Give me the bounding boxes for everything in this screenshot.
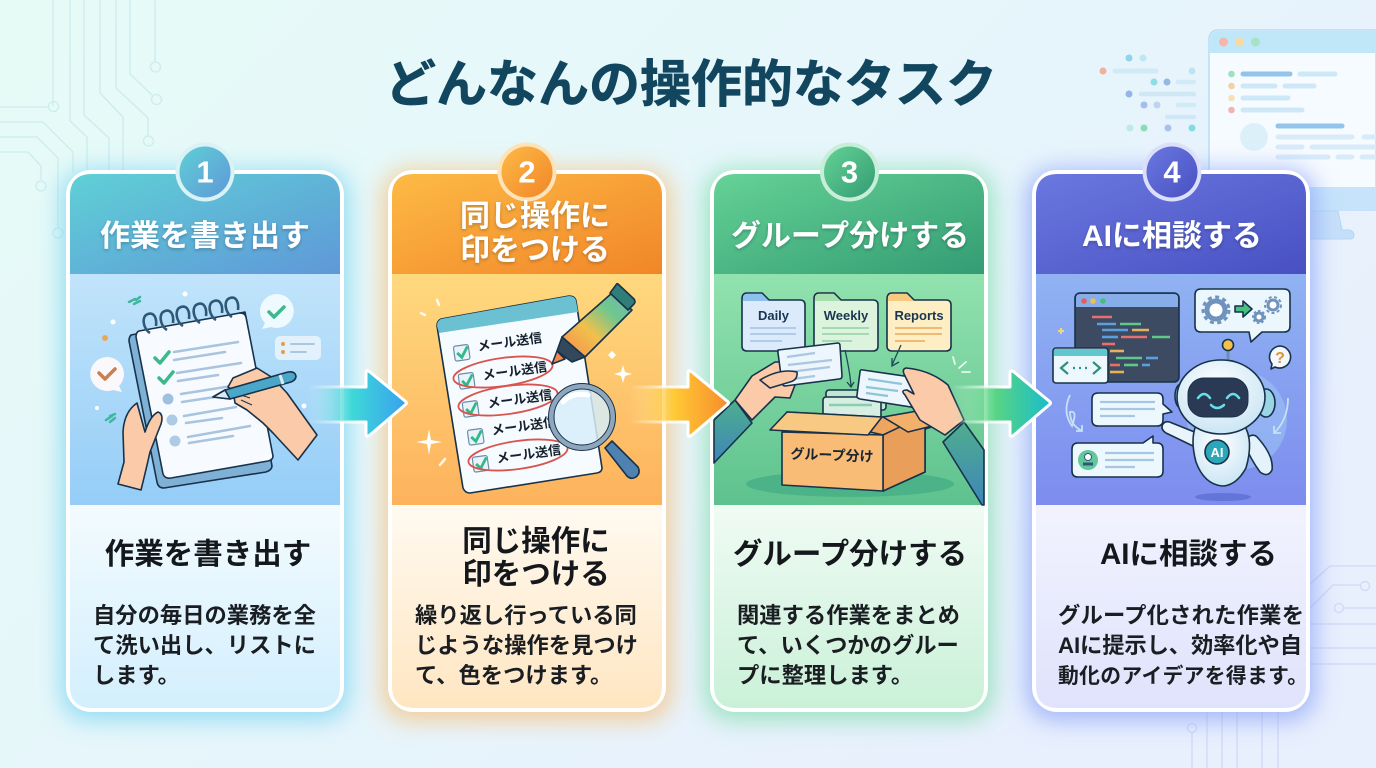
curved arrows	[1066, 395, 1082, 431]
right sleeve	[943, 422, 984, 505]
illustration panel 2	[392, 274, 662, 505]
body text 4: 動化のアイデアを得ます。	[1058, 664, 1308, 688]
illustration panel 3	[714, 274, 984, 505]
body text 1: します。	[93, 663, 180, 688]
background: code dots	[1100, 54, 1196, 132]
card frame 1	[68, 172, 342, 710]
checklist sheet	[437, 296, 602, 493]
list rows	[453, 330, 562, 472]
robot body	[1193, 422, 1250, 486]
left hand	[735, 362, 800, 420]
highlighter	[562, 293, 632, 357]
number badge 3	[820, 142, 879, 202]
number badge 1	[176, 142, 234, 202]
illustration: AI robot assistant: AI	[1210, 445, 1224, 460]
sparkles	[416, 429, 442, 455]
header band 2	[392, 174, 662, 274]
box label: グループ分け	[790, 446, 874, 464]
arrow: step 1 to 2	[307, 371, 406, 436]
body text 4: グループ化された作業を	[1058, 602, 1304, 628]
body background 2	[392, 505, 662, 708]
pen	[213, 372, 296, 399]
left sleeve	[714, 400, 752, 463]
number badge 1: 1	[196, 154, 214, 190]
right hand	[228, 368, 317, 460]
arrow: step 3 to 4	[951, 371, 1050, 436]
body text 3: て、いくつかのグルー	[737, 632, 959, 658]
body text 2: じような操作を見つけ	[415, 633, 638, 658]
AI badge	[1205, 440, 1229, 464]
hand-held card right	[857, 370, 919, 407]
card frame 2	[390, 172, 664, 710]
list rows: メール送信	[490, 414, 557, 438]
number badge 2	[498, 142, 556, 202]
speech bubbles	[260, 294, 294, 329]
body text 3: プに整理します。	[737, 663, 913, 688]
illustration: AI robot assistant: ?	[1275, 350, 1285, 367]
card frame 4	[1034, 172, 1308, 710]
illustration panel 4	[1036, 274, 1306, 505]
folder Daily: Daily	[758, 308, 790, 323]
heading 2: 印をつける	[460, 234, 610, 267]
body heading 4: AIに相談する	[1100, 538, 1277, 571]
box shadow	[746, 471, 954, 497]
illustration: checklist, highlighter and magnifier	[416, 284, 639, 493]
illustration: notepad with hands	[90, 292, 321, 490]
background: monitor window	[1209, 30, 1376, 239]
panel: step 2	[390, 142, 664, 710]
small tag window	[1053, 348, 1108, 383]
red circles	[452, 351, 569, 476]
question bubble	[1269, 346, 1291, 369]
code window	[1075, 293, 1179, 382]
header band 4	[1036, 174, 1306, 274]
robot shadow	[1195, 493, 1251, 501]
robot ears	[1175, 384, 1187, 408]
number badge 4	[1142, 142, 1202, 202]
inner cards	[826, 390, 886, 410]
list rows: メール送信	[476, 330, 543, 354]
message bubble 2	[1072, 436, 1163, 477]
card glows	[61, 170, 1315, 720]
body text 1: て洗い出し、リストに	[93, 633, 316, 658]
illustration panel 1	[70, 274, 340, 505]
magnifier	[605, 441, 639, 478]
body background 3	[714, 505, 984, 708]
body text 2: 繰り返し行っている同	[415, 603, 637, 628]
body text 4: AIに提示し、効率化や自	[1058, 633, 1302, 658]
robot arms	[1162, 422, 1197, 446]
body text 2: て、色をつけます。	[415, 663, 612, 688]
gear speech bubble	[1195, 289, 1290, 342]
number badge 3: 3	[841, 154, 858, 190]
notepad	[129, 312, 272, 488]
list rows: メール送信	[481, 359, 548, 383]
check marks	[155, 352, 173, 383]
robot face	[1188, 378, 1248, 417]
folder Reports	[887, 293, 951, 351]
right hand	[903, 368, 964, 435]
title: どんなんの操作的なタスク	[385, 56, 997, 113]
folder Weekly: Weekly	[824, 308, 869, 323]
robot antenna	[1226, 350, 1230, 362]
number badge 4: 4	[1163, 154, 1181, 190]
list rows: メール送信	[486, 387, 553, 411]
illustration: AI robot assistant	[1053, 289, 1291, 501]
down arrows	[845, 345, 901, 387]
panel: step 4	[1034, 142, 1308, 710]
circuit pattern: top left	[0, 0, 162, 238]
heading 3: グループ分けする	[731, 220, 969, 253]
folder Reports: Reports	[894, 308, 944, 323]
circuit pattern: bottom right	[1188, 566, 1376, 768]
heading 2: 同じ操作に	[460, 200, 610, 233]
panel: step 3	[712, 142, 986, 710]
body background 4	[1036, 505, 1306, 708]
body heading 2: 印をつける	[462, 558, 610, 591]
body heading 1: 作業を書き出す	[105, 538, 311, 571]
header band 3	[714, 174, 984, 274]
heading 1: 作業を書き出す	[100, 220, 310, 253]
rings	[144, 298, 238, 333]
body heading 2: 同じ操作に	[462, 525, 610, 558]
heading 4: AIに相談する	[1082, 220, 1262, 253]
panel: step 1	[68, 142, 342, 710]
arrow: step 2 to 3	[629, 371, 728, 436]
number badge 2: 2	[518, 154, 536, 190]
folder Daily	[742, 293, 805, 351]
card frame 3	[712, 172, 986, 710]
body background 1	[70, 505, 340, 708]
message bubble 1	[1092, 393, 1172, 426]
illustration: folders, hands and box	[714, 293, 984, 505]
hand-held card left	[778, 343, 842, 386]
header band 1	[70, 174, 340, 274]
left hand	[118, 403, 162, 490]
box	[787, 412, 944, 491]
list rows: メール送信	[495, 442, 562, 466]
robot head	[1177, 360, 1265, 434]
body text 3: 関連する作業をまとめ	[737, 603, 960, 628]
folder Weekly	[814, 293, 878, 351]
body heading 3: グループ分けする	[733, 538, 967, 571]
body text 1: 自分の毎日の業務を全	[93, 603, 316, 628]
